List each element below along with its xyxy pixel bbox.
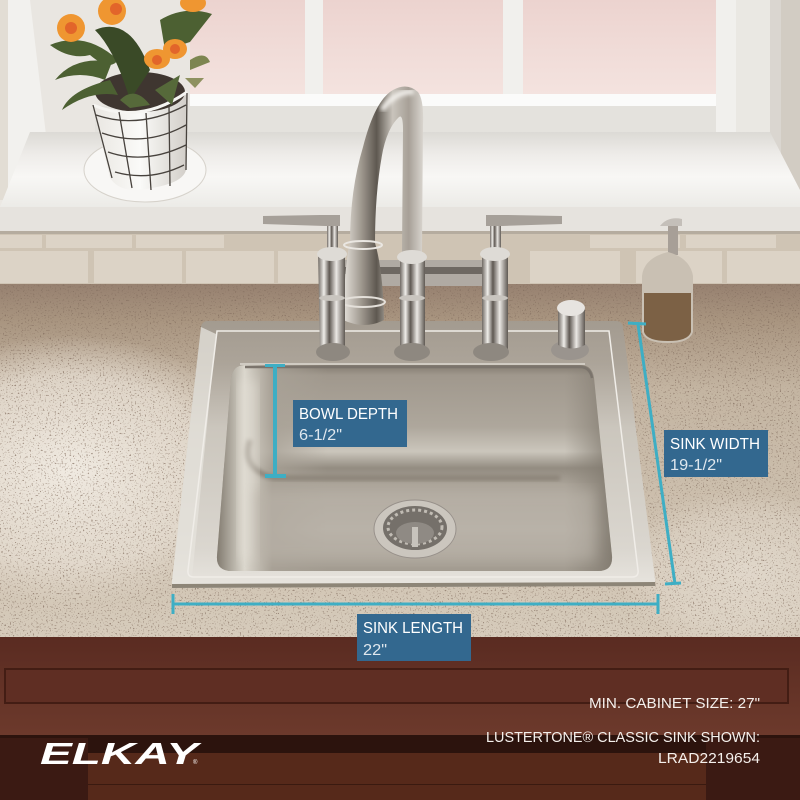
icon: saucer (84, 138, 206, 202)
label: sink length (357, 614, 471, 661)
sink drain (374, 500, 456, 558)
logo: Elkay (40, 736, 203, 771)
window sill (0, 132, 800, 234)
label: bowl depth (293, 400, 407, 447)
sink bowl (217, 364, 612, 571)
countertop (0, 284, 800, 650)
logo: Elkay: ® (193, 759, 198, 766)
soap bottle (642, 218, 693, 343)
icon: flowers (57, 0, 206, 69)
icon: leaves (50, 11, 212, 110)
sink (172, 321, 655, 588)
label: bowl depth: BOWL DEPTH (299, 406, 398, 423)
background: window and wall (0, 0, 800, 240)
logo: Elkay: ELKAY (40, 736, 203, 771)
faucet (263, 86, 589, 361)
label: sink width: SINK WIDTH (670, 436, 760, 453)
gooseneck spout (343, 86, 423, 325)
soap dispenser (551, 300, 589, 360)
bowl depth dimension line (265, 364, 286, 478)
sink rim (172, 321, 655, 588)
icon: pot (93, 72, 187, 190)
center column (394, 250, 430, 361)
note: model shown (486, 730, 760, 767)
bridge pipe (335, 260, 485, 286)
label: sink length: 22" (363, 642, 387, 659)
label: bowl depth: 6-1/2" (299, 427, 342, 444)
plant in wire pot (50, 0, 212, 202)
backsplash tile (0, 234, 800, 286)
sink width dimension line (628, 323, 681, 584)
note: model shown: LRAD2219654 (658, 751, 760, 767)
note: minimum cabinet size: MIN. CABINET SIZE: 27" (589, 696, 760, 712)
label: sink length: SINK LENGTH (363, 620, 463, 637)
right handle column (473, 215, 562, 361)
left handle column (263, 215, 350, 361)
sink length dimension line (173, 594, 658, 614)
note: model shown: LUSTERTONE® CLASSIC SINK SHOWN: (486, 730, 760, 746)
label: sink width (664, 430, 768, 477)
cabinet (0, 637, 800, 800)
label: sink width: 19-1/2" (670, 457, 722, 474)
